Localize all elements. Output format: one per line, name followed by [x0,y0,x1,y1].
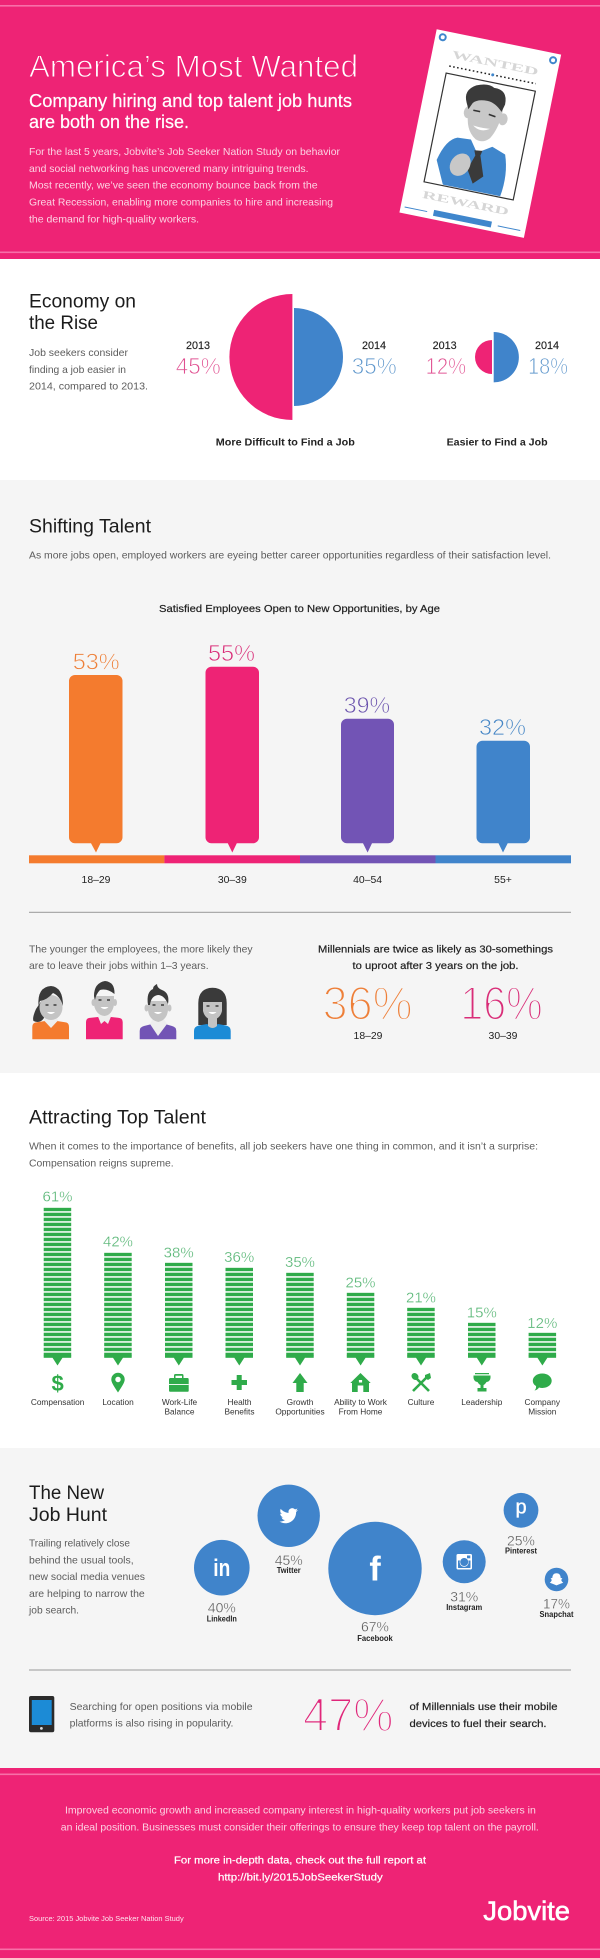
description: Trailing relatively close [29,1539,130,1550]
bar: growth opportunities [275,1254,325,1416]
bubble: facebook: f [369,1551,381,1589]
stat: 16 percent: 30–39 [489,1031,518,1042]
bar: 55+ [476,714,530,886]
chart: easier to find a job: 2013 [433,340,457,352]
bubble: facebook: Facebook [357,1634,393,1643]
bubble: instagram [443,1540,486,1612]
subtitle [29,90,352,132]
bubble: pinterest: p [515,1497,527,1519]
closing statement: an ideal position. Businesses must consider their offerings to ensure they keep top talent on the payroll. [61,1822,539,1833]
chart: more difficult to find a job: 35% [352,353,397,379]
description [29,1142,538,1169]
description: finding a job easier in [29,365,126,376]
bar: 18-29 [69,648,123,886]
bar: growth opportunities: 35% [285,1254,315,1271]
bar: ability to work from home: From Home [339,1406,383,1416]
text: millennials twice as likely: to uproot after 3 years on the job. [352,961,518,972]
call to action: For more in-depth data, check out the full report at [174,1856,426,1867]
heading: Attracting Top Talent [29,1106,207,1128]
description [29,348,148,393]
intro text: and social networking has uncovered many intriguing trends. [29,164,308,175]
stat: 47 percent: 47% [303,1688,393,1741]
chart: more difficult to find a job [176,294,397,449]
bar: work-life balance: Work-Life [162,1397,198,1407]
bar: 18-29: 53% [73,648,120,674]
chart title: Satisfied Employees Open to New Opportunities, by Age [159,604,440,615]
call to action: http://bit.ly/2015JobSeekerStudy [218,1873,384,1884]
panel: shifting talent [0,480,600,1073]
text: younger employees [29,944,254,972]
bar: 55+: 55+ [494,875,512,886]
bubble: linkedin: 40% [208,1599,236,1615]
person 2 [86,981,123,1039]
chart: easier to find a job: 18% [528,353,568,379]
person 3 [140,984,176,1039]
bubble: linkedin [194,1540,250,1623]
subtitle: are both on the rise. [29,111,189,132]
bubble: twitter: Twitter [277,1566,301,1575]
icons: four employees [32,981,231,1039]
bar: work-life balance: Balance [165,1406,195,1416]
description: 2014, compared to 2013. [29,382,148,393]
bar: 30-39: 30–39 [218,875,247,886]
bar: 40-54 [341,692,394,886]
panel: attracting top talent [0,1073,600,1448]
description: are helping to narrow the [29,1589,145,1600]
axis strip [29,855,571,863]
text: millennials mobile [410,1702,558,1730]
bubble: facebook [328,1522,422,1643]
panel: header [0,0,600,259]
panel: the new job hunt [0,1448,600,1768]
person 1 [32,986,69,1039]
bar: location [102,1234,134,1407]
closing statement: Improved economic growth and increased company interest in high-quality workers put job seekers in [65,1805,536,1816]
icon: wanted poster [399,29,561,238]
heading [29,1482,108,1526]
text: millennials mobile: of Millennials use their mobile [410,1702,558,1713]
description: behind the usual tools, [29,1555,134,1566]
stat: 16 percent: 16% [460,976,543,1029]
chart: more difficult to find a job: More Difficult to Find a Job [216,438,355,449]
intro text: For the last 5 years, Jobvite’s Job Seeker Nation Study on behavior [29,147,341,158]
bar: company mission [525,1315,561,1416]
chart: more difficult to find a job: 2014 [362,340,386,352]
bar: growth opportunities: Opportunities [275,1406,325,1416]
heading: Economy on [29,291,136,313]
description: As more jobs open, employed workers are eyeing better career opportunities regardless of their satisfaction level. [29,550,551,561]
person 4 [194,988,231,1039]
chart: more difficult to find a job: 2013 [186,340,210,352]
closing statement [61,1805,539,1833]
panel: footer [0,1768,600,1958]
bar: health benefits: 36% [224,1249,254,1266]
bubble: pinterest [504,1493,538,1556]
bar: ability to work from home: Ability to Work [334,1397,388,1407]
bar: 30-39 [206,640,259,886]
call to action [174,1856,426,1884]
bar: leadership: Leadership [461,1397,503,1407]
bar: growth opportunities: Growth [287,1397,314,1407]
heading: Shifting Talent [29,515,152,537]
bar: health benefits: Benefits [225,1406,254,1416]
description: new social media venues [29,1572,145,1583]
heading: the Rise [29,312,98,334]
bar: health benefits [224,1249,254,1416]
chart: easier to find a job [426,332,568,449]
bubble: snapchat: 17% [543,1596,570,1612]
bar: culture [406,1290,436,1407]
bar: ability to work from home: 25% [345,1274,376,1291]
icon: mobile phone [29,1696,54,1732]
logo: jobvite: Jobvite [483,1896,570,1926]
description [28,1539,145,1617]
bubble: linkedin: in [213,1555,230,1582]
text: millennials mobile: devices to fuel their search. [410,1719,546,1730]
bubble: pinterest: 25% [507,1533,535,1549]
stat: 36 percent: 18–29 [354,1031,383,1042]
bubble: snapchat [540,1568,574,1619]
chart: easier to find a job: 2014 [535,340,559,352]
panel: economy on the rise [0,259,600,480]
text: younger employees: are to leave their jobs within 1–3 years. [29,961,209,972]
icon: wanted poster: REWARD [421,189,510,218]
text: mobile search [70,1702,253,1730]
icon: wanted poster: WANTED [451,49,539,78]
subtitle: Company hiring and top talent job hunts [29,90,352,111]
heading: The New [29,1482,105,1504]
stat: 36 percent: 36% [323,976,413,1029]
bar: 18-29: 18–29 [82,875,111,886]
text: millennials twice as likely: Millennials are twice as likely as 30-somethings [318,944,553,955]
heading: Job Hunt [29,1504,108,1526]
bubble: snapchat: Snapchat [540,1610,574,1619]
bubble: instagram: Instagram [446,1603,482,1612]
intro text [29,147,341,225]
bar: compensation: $ [51,1371,64,1396]
text: younger employees: The younger the employees, the more likely they [29,944,254,955]
bubble: instagram: 31% [450,1589,478,1605]
bar: compensation [31,1189,85,1407]
bar: location: 42% [103,1234,133,1251]
text: millennials twice as likely [318,944,553,972]
bar: 55+: 32% [479,714,526,740]
bar: ability to work from home [334,1274,388,1416]
bar: work-life balance: 38% [164,1244,194,1261]
bar: work-life balance [162,1244,198,1416]
description: Job seekers consider [29,348,129,359]
intro text: Great Recession, enabling more companies to hire and increasing [29,198,333,209]
text: mobile search: platforms is also rising in popularity. [70,1719,233,1730]
bar: 40-54: 40–54 [353,875,382,886]
bar: company mission: Company [525,1397,561,1407]
bar: leadership: 15% [467,1305,497,1322]
chart: easier to find a job: Easier to Find a Job [447,438,548,449]
bar: leadership [461,1305,503,1407]
bar: location: Location [102,1397,134,1407]
description: When it comes to the importance of benefits, all job seekers have one thing in common, and it isn’t a surprise: [29,1142,538,1153]
bar: compensation: 61% [42,1189,73,1206]
intro text: Most recently, we’ve seen the economy bounce back from the [29,181,318,192]
source: Source: 2015 Jobvite Job Seeker Nation Study [29,1914,184,1923]
bar: 40-54: 39% [344,692,390,718]
bar: company mission: Mission [528,1406,557,1416]
heading [29,291,136,334]
bubble: linkedin: LinkedIn [207,1614,237,1623]
bar: company mission: 12% [527,1315,557,1332]
bar: health benefits: Health [228,1397,252,1407]
bubble: pinterest: Pinterest [505,1547,537,1556]
bar chart: open to new opportunities by age [29,640,571,886]
bar: culture: 21% [406,1290,436,1307]
bar: compensation: Compensation [31,1397,85,1407]
description: job search. [28,1606,79,1617]
bubble: twitter [258,1485,320,1575]
text: mobile search: Searching for open positions via mobile [70,1702,253,1713]
intro text: the demand for high-quality workers. [29,214,199,225]
title: America’s Most Wanted [29,48,358,84]
bubble: facebook: 67% [361,1619,389,1635]
bar: culture: Culture [408,1397,435,1407]
bubble: twitter: 45% [275,1552,303,1568]
chart: easier to find a job: 12% [426,353,466,379]
bar: 30-39: 55% [208,640,255,666]
chart: more difficult to find a job: 45% [176,353,221,379]
description: Compensation reigns supreme. [29,1158,174,1169]
